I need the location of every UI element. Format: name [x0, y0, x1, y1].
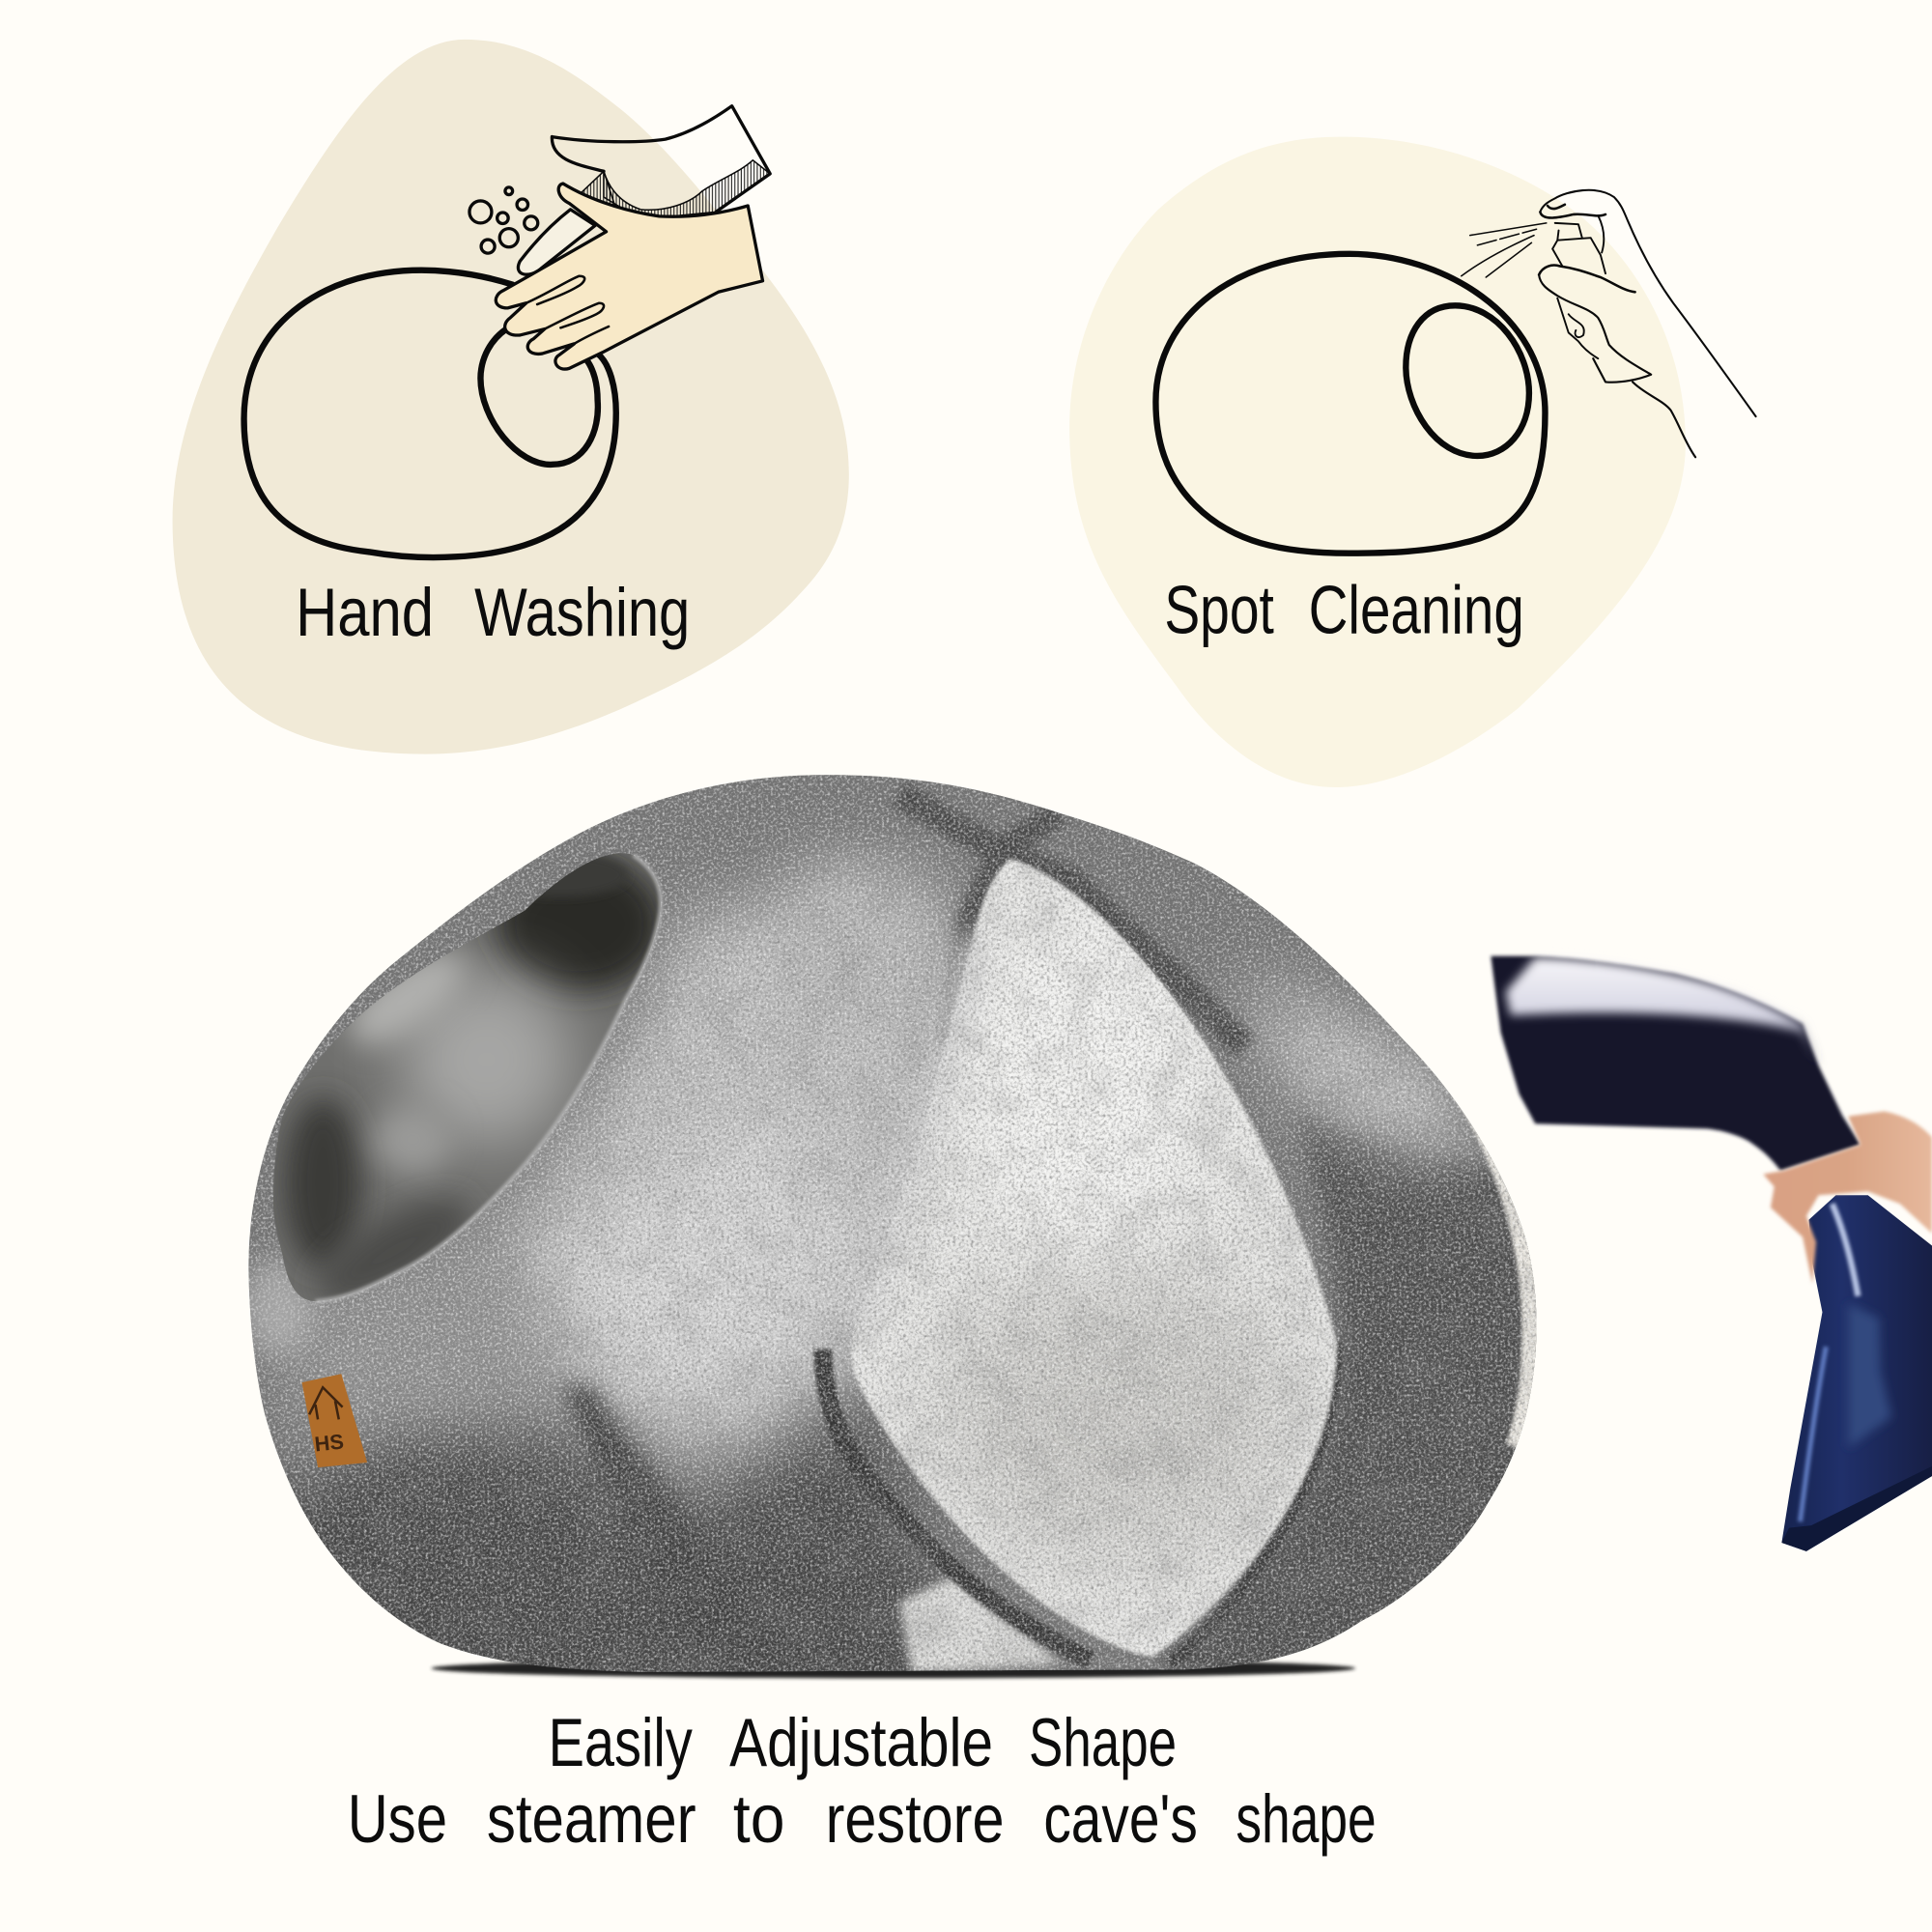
caption: easily adjustable shape: Shape — [1029, 1704, 1177, 1780]
icon: hand with spray bottle — [1539, 190, 1756, 457]
icon: soap bubbles — [469, 187, 538, 253]
panel: spot cleaning — [1069, 137, 1756, 787]
cave opening with steam — [273, 853, 663, 1321]
caption: easily adjustable shape: Easily — [549, 1704, 693, 1780]
caption: easily adjustable shape: steamer — [487, 1780, 696, 1857]
caption: easily adjustable shape: cave's — [1043, 1780, 1198, 1857]
blob background: hand washing — [173, 40, 849, 754]
caption: easily adjustable shape: restore — [826, 1780, 1005, 1857]
photo: felt cat cave — [234, 764, 1552, 1725]
ground shadow — [431, 1659, 1355, 1678]
icon: cat cave outline — [1155, 254, 1545, 554]
label: Spot Cleaning — [1164, 572, 1524, 648]
steamer head — [1491, 956, 1861, 1171]
label: Hand Washing — [296, 574, 690, 650]
caption: easily adjustable shape: Use — [348, 1780, 447, 1857]
cream rim at right edge — [1453, 1097, 1536, 1449]
label: Spot Cleaning: Spot — [1164, 572, 1274, 648]
icon: spray mist — [1462, 223, 1547, 277]
leather brand tag: HS — [313, 1430, 345, 1457]
icon: cat cave outline — [244, 270, 616, 557]
steamer lower body — [1781, 1195, 1932, 1551]
caption: easily adjustable shape — [348, 1704, 1377, 1857]
blob background: spot cleaning — [1069, 137, 1686, 787]
label: Spot Cleaning: Cleaning — [1309, 572, 1524, 648]
icon: washing hands — [496, 106, 770, 369]
photo: hand holding garment steamer — [1491, 956, 1932, 1551]
caption: easily adjustable shape: to — [733, 1780, 784, 1857]
soft blend of panel's left edge into the light felt — [856, 936, 974, 1324]
label: Hand Washing: Washing — [474, 574, 690, 650]
leather brand tag — [301, 1374, 367, 1467]
felt fibre texture — [352, 866, 1536, 1665]
panel: hand washing — [173, 40, 849, 754]
caption: easily adjustable shape: shape — [1236, 1780, 1377, 1857]
white felt panel — [851, 859, 1337, 1658]
hand — [1763, 1112, 1932, 1284]
caption: easily adjustable shape: Adjustable — [729, 1704, 993, 1780]
felt body — [234, 764, 1552, 1725]
label: Hand Washing: Hand — [296, 574, 434, 650]
